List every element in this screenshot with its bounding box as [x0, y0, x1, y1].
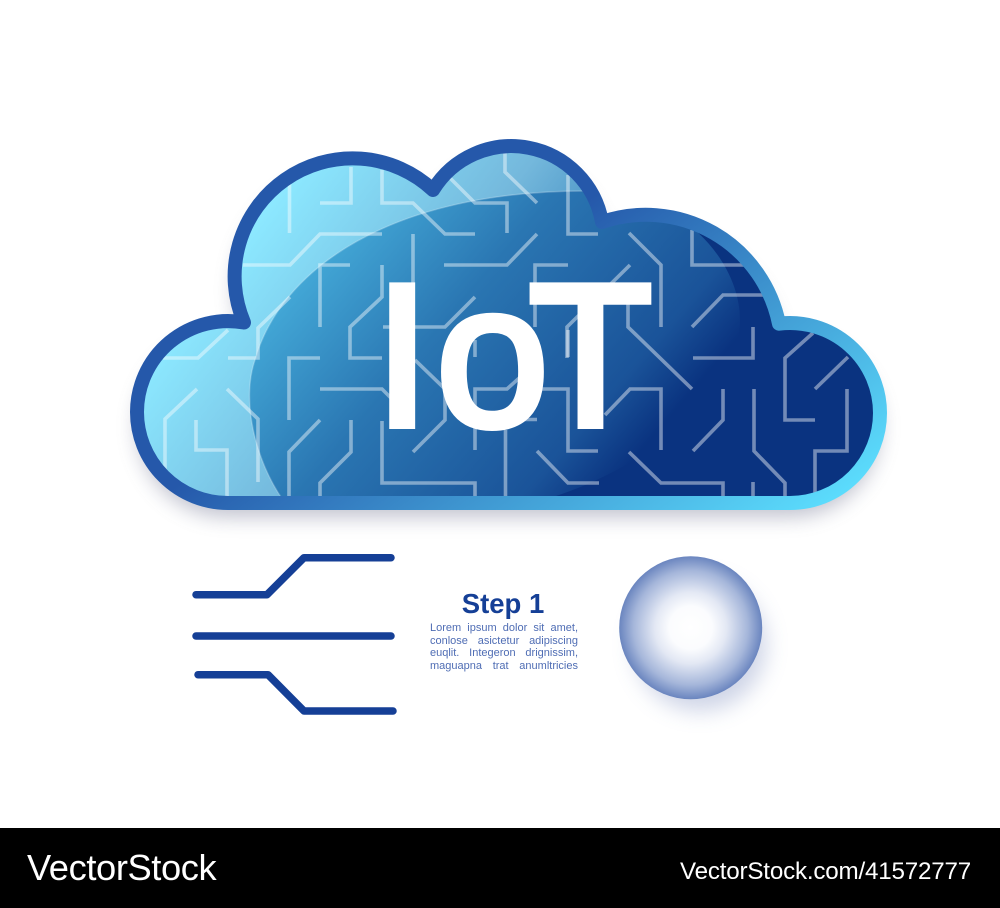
- circle: [619, 556, 762, 699]
- cloud background fill: [144, 153, 873, 496]
- footer bar: [0, 828, 1000, 908]
- circuit traces: [163, 153, 848, 498]
- body text: Lorem ipsum dolor sit amet,: [430, 622, 578, 634]
- glossy highlight area: [144, 153, 582, 496]
- body text: euqlit. Integeron drignissim,: [430, 647, 578, 659]
- cloud shadow: [137, 160, 880, 517]
- inner gradient blob: [250, 191, 740, 500]
- title: IoT: o: [436, 242, 549, 470]
- body text: maguapna trat anumltricies: [430, 660, 578, 672]
- heading: Step 1: Step 1: [462, 588, 544, 619]
- circle shadow: [634, 579, 766, 711]
- footer image reference: VectorStock.com/41572777: [680, 858, 971, 885]
- connector lines: [196, 558, 393, 711]
- title: IoT: I: [374, 242, 430, 470]
- title: IoT: T: [528, 242, 653, 470]
- body text: [430, 622, 578, 672]
- footer brand: VectorStock: VectorStock: [27, 847, 218, 888]
- cloud outline: [137, 146, 880, 503]
- body text: conlose asictetur adipiscing: [430, 634, 578, 646]
- blob rim highlight: [250, 191, 590, 500]
- cloud: IoT circuit cloud: [120, 130, 900, 520]
